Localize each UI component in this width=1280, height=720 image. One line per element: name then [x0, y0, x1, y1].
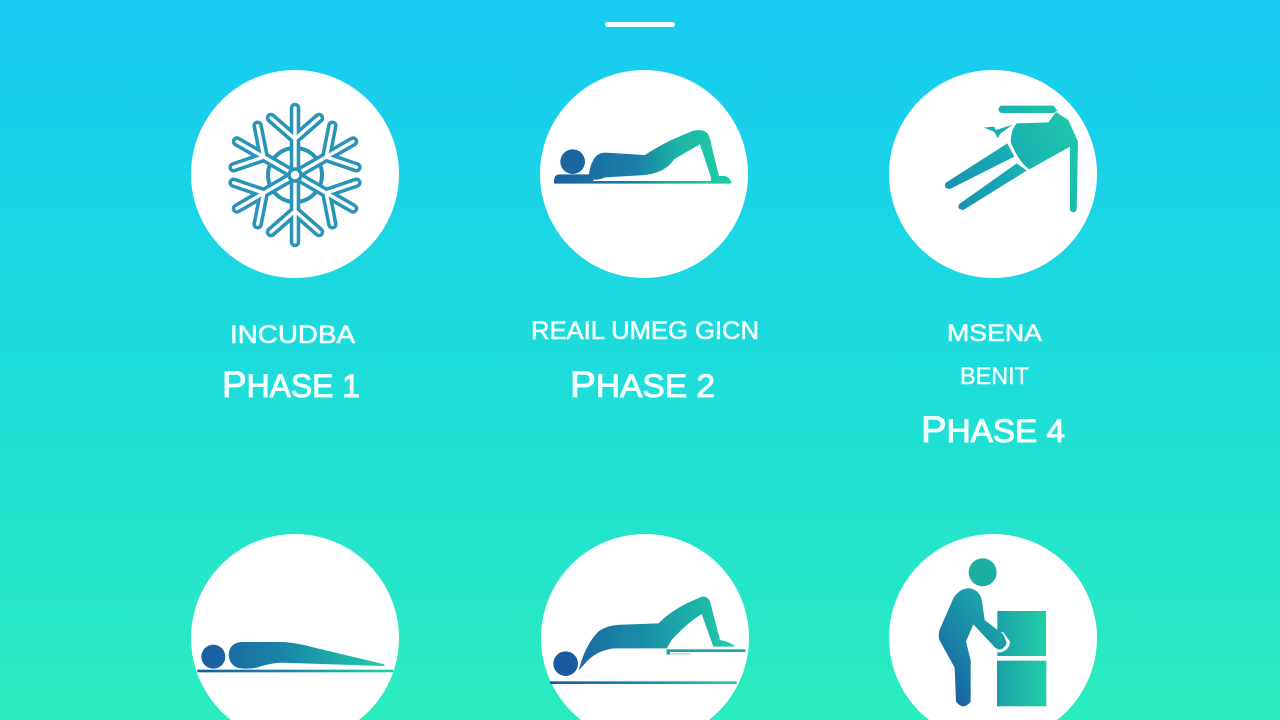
heading: phase 2: PHASE 2	[570, 364, 715, 405]
panel: lower right	[889, 534, 1097, 720]
heading: phase 4: PHASE 4	[921, 409, 1065, 450]
label: phase 2 caption: REAIL UMEG GICN	[531, 317, 759, 345]
panel: lower middle	[541, 534, 749, 720]
circle: phase 4	[889, 70, 1097, 278]
circle: phase 1	[191, 70, 399, 278]
circle: lower right	[889, 534, 1097, 720]
circle: lower middle	[541, 534, 749, 720]
panel: phase 2	[531, 70, 759, 405]
icon: snowflake	[225, 108, 365, 242]
label: phase 4 caption line 1: MSENA	[947, 320, 1042, 347]
label: phase 4 caption line 2: BENIT	[960, 363, 1029, 390]
circle: phase 2	[540, 70, 748, 278]
panel: phase 4	[889, 70, 1097, 450]
panel: phase 1	[191, 70, 399, 405]
heading: phase 1: PHASE 1	[222, 364, 360, 405]
circle: lower left	[191, 534, 399, 720]
icon: person lifting boxes	[939, 558, 1046, 706]
icon: bent figure	[945, 106, 1078, 212]
panel: lower left	[191, 534, 399, 720]
icon: person lying with raised knee	[554, 130, 731, 184]
top indicator bar	[605, 22, 675, 27]
label: phase 1 caption: INCUDBA	[230, 321, 355, 349]
icon: person pushing up on a step	[550, 597, 745, 684]
icon: person lying flat	[197, 642, 393, 672]
